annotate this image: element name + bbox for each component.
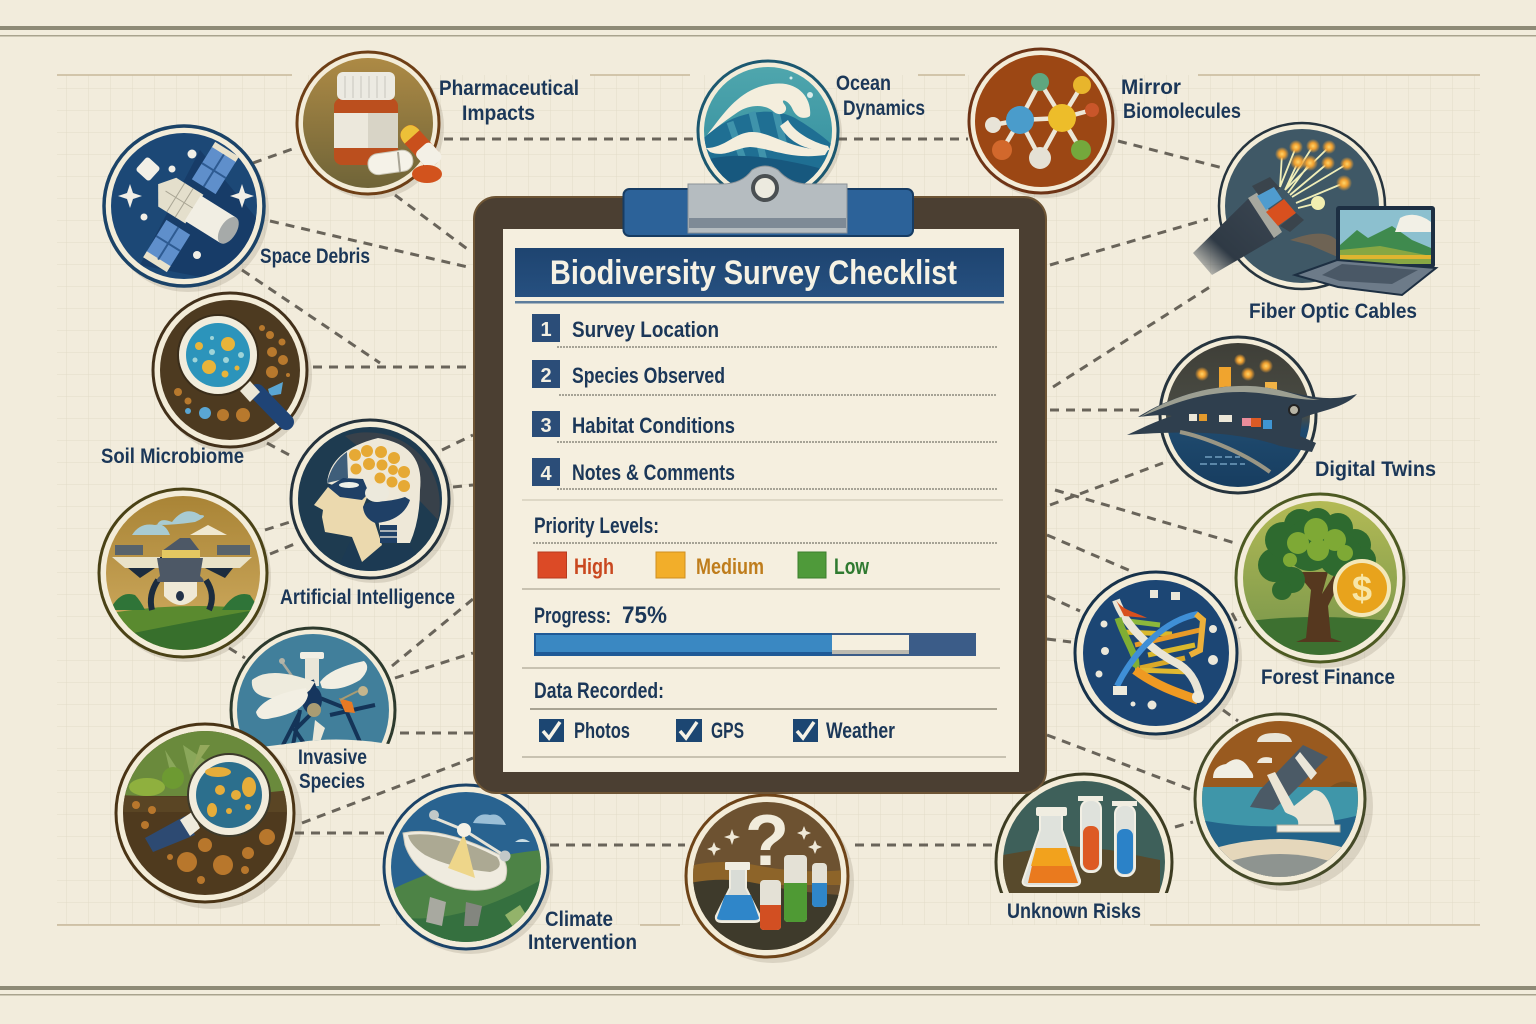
icon: space debris satellite <box>104 126 271 292</box>
checklist item 4: Notes & Comments <box>572 460 735 485</box>
checklist item 4 <box>532 458 997 489</box>
topic labels: Mirror <box>1121 76 1181 99</box>
heading banner: Biodiversity Survey Checklist <box>550 254 957 292</box>
icon: mirror biomolecules network <box>969 49 1118 198</box>
data recorded checkboxes: Photos <box>574 718 630 743</box>
checklist item 2 <box>532 360 997 395</box>
topic labels: Dynamics <box>843 97 925 120</box>
icon: fiber optic cable and laptop <box>1193 123 1436 295</box>
clipboard board <box>474 197 1046 793</box>
topic labels: Climate <box>545 908 613 931</box>
topic labels: Impacts <box>462 102 535 125</box>
icon: forest finance tree and coin <box>1236 494 1409 668</box>
icon: DNA helix <box>1075 572 1242 740</box>
icon: question mark with lab glassware <box>686 795 854 963</box>
icon: question mark with lab glassware: ? <box>745 801 789 881</box>
progress bar <box>534 602 976 656</box>
icon: ocean wave <box>696 60 842 184</box>
topic labels: Fiber Optic Cables <box>1249 300 1417 323</box>
checklist item 4: 4 <box>540 463 552 485</box>
priority levels: Priority Levels: <box>534 513 659 538</box>
topic labels: Forest Finance <box>1261 666 1395 689</box>
laptop <box>1295 206 1436 295</box>
icon: microscope at water's edge <box>1195 714 1373 891</box>
checklist item 3 <box>532 411 997 442</box>
topic labels <box>101 72 1436 954</box>
priority levels <box>533 513 998 579</box>
topic labels: Space Debris <box>260 245 370 268</box>
icon: climate intervention satellite dish <box>384 785 553 954</box>
metal clip <box>624 166 913 236</box>
progress bar: Progress: <box>534 603 611 628</box>
icon: forest finance tree and coin: $ <box>1352 568 1372 609</box>
priority levels: High <box>574 554 614 579</box>
checklist item 2: 2 <box>540 365 552 387</box>
topic labels: Soil Microbiome <box>101 445 244 468</box>
icon: digital twins <box>1127 337 1357 493</box>
topic labels: Digital Twins <box>1315 458 1436 481</box>
topic labels: Species <box>299 770 365 793</box>
icon: agricultural drone <box>99 489 271 662</box>
icon: soil sample magnifier <box>116 724 302 909</box>
checklist item 1: 1 <box>540 319 552 341</box>
icon: soil microbiome magnifier <box>153 293 312 453</box>
topic labels: Invasive <box>298 746 367 769</box>
topic labels: Unknown Risks <box>1007 900 1141 923</box>
checklist item 1: Survey Location <box>572 317 719 342</box>
data recorded checkboxes: Data Recorded: <box>534 678 664 703</box>
icon: unknown risks flask and test tubes <box>994 772 1174 893</box>
paper sheet <box>503 229 1019 772</box>
data recorded checkboxes: GPS <box>711 718 744 743</box>
progress bar: 75% <box>622 602 667 629</box>
checklist item 3: 3 <box>540 415 552 437</box>
topic labels: Pharmaceutical <box>439 77 579 100</box>
dashed connector lines <box>229 139 1240 845</box>
clipboard <box>474 166 1046 793</box>
icon: pharmaceutical bottle and pills <box>297 52 444 199</box>
topic labels: Artificial Intelligence <box>280 586 455 609</box>
data recorded checkboxes: Weather <box>826 718 895 743</box>
checklist item 2: Species Observed <box>572 363 725 388</box>
heading banner <box>515 248 1004 304</box>
topic labels: Ocean <box>836 72 891 95</box>
icon: invasive species mosquito <box>230 626 396 746</box>
priority levels: Low <box>834 554 870 579</box>
topic labels: Intervention <box>528 931 637 954</box>
checklist item 1 <box>532 314 997 347</box>
icon: artificial intelligence head <box>291 420 454 583</box>
data recorded checkboxes <box>530 678 997 743</box>
priority levels: Medium <box>696 554 764 579</box>
checklist item 3: Habitat Conditions <box>572 413 735 438</box>
topic labels: Biomolecules <box>1123 100 1241 123</box>
